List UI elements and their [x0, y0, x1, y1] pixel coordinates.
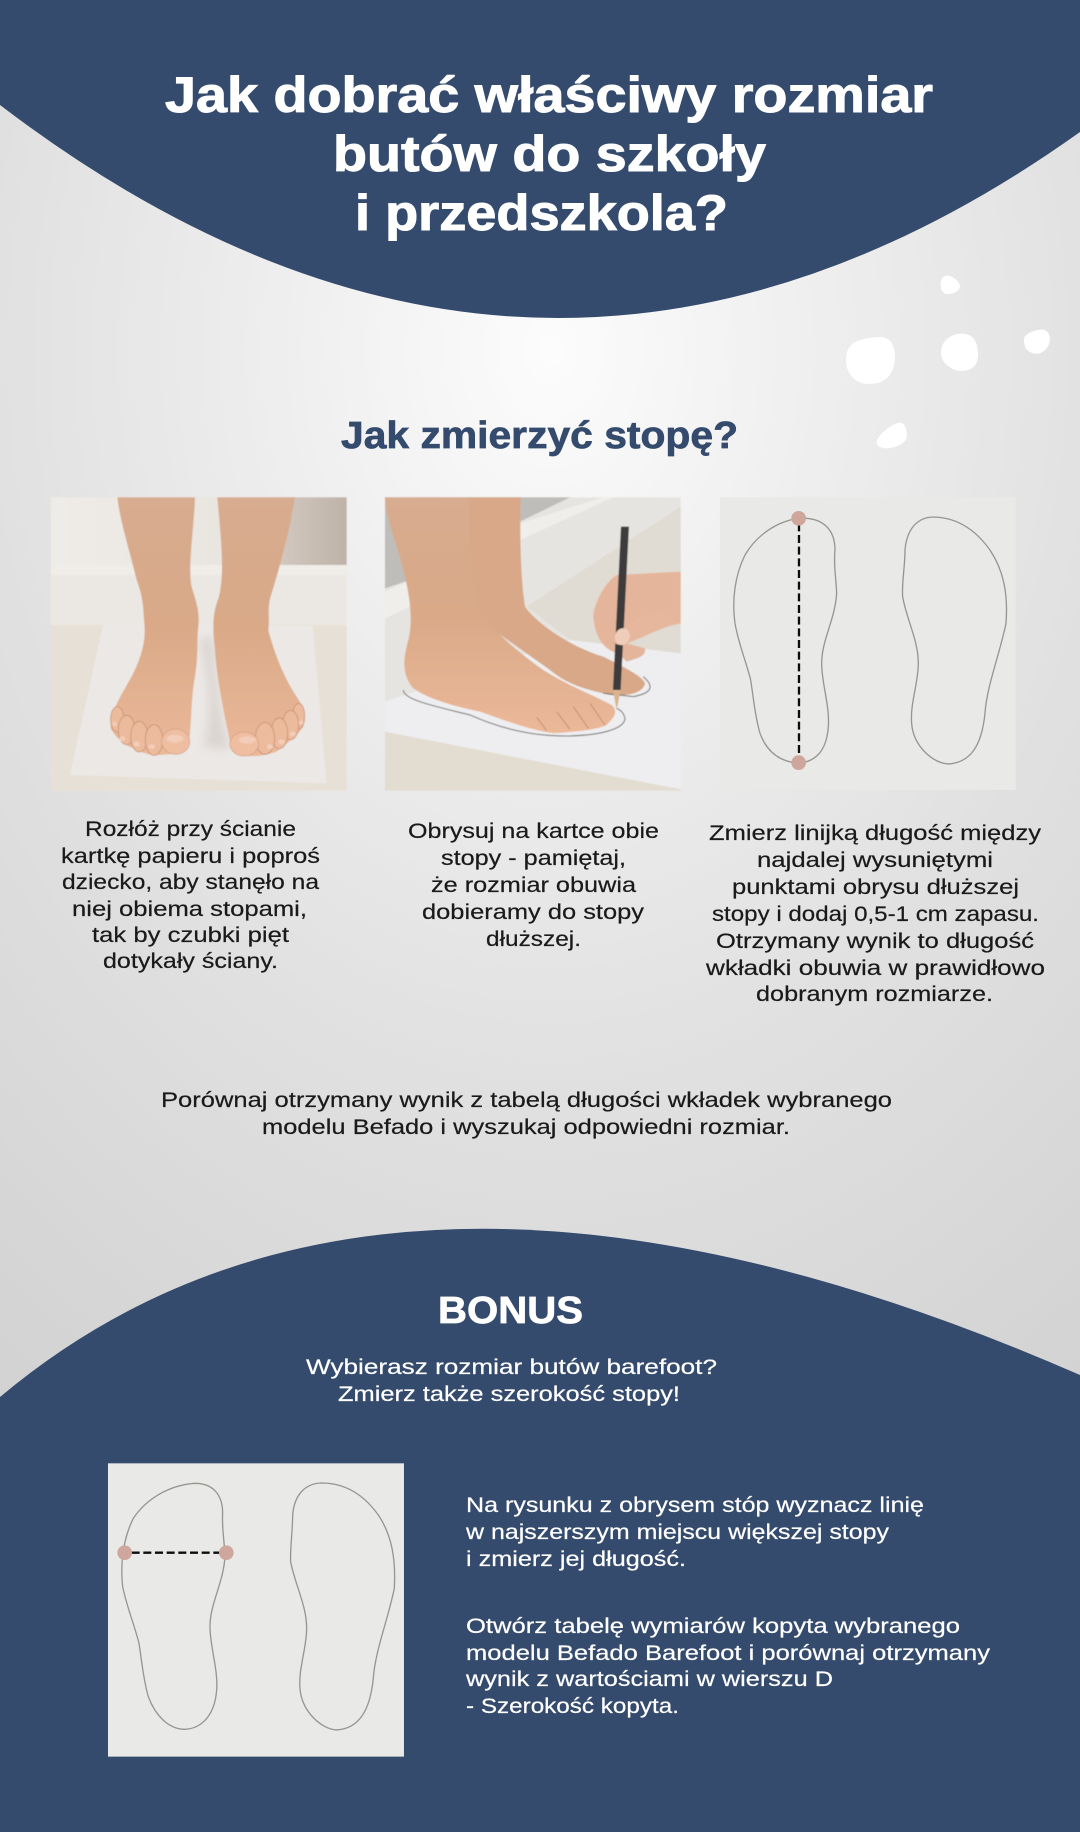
dashed length line	[795, 523, 802, 758]
bonus band	[0, 1229, 1080, 1832]
left foot outline	[122, 1483, 225, 1729]
bonus instructions: open the table: wynik z wartościami w wierszu D	[465, 1668, 833, 1691]
left foot outline	[734, 518, 837, 763]
comparison note: Porównaj otrzymany wynik z tabelą długości wkładek wybranego	[161, 1089, 892, 1112]
right foot outline	[902, 517, 1007, 764]
step 1 text: niej obiema stopami,	[72, 898, 307, 921]
bonus subheading	[306, 1356, 717, 1406]
step 2 text	[408, 820, 659, 951]
title	[165, 67, 933, 241]
step 3 text	[705, 822, 1045, 1006]
step 2 text: że rozmiar obuwia	[431, 874, 636, 897]
bonus instructions: open the table	[465, 1615, 991, 1718]
step 3 text: Zmierz linijką długość między	[709, 822, 1042, 845]
bonus instructions: draw a line: Na rysunku z obrysem stóp wyznacz linię	[466, 1494, 924, 1517]
step 2 text: Obrysuj na kartce obie	[408, 820, 659, 843]
decorative white blobs	[846, 276, 1050, 448]
step 1 text: tak by czubki pięt	[92, 924, 289, 947]
step 3 text: najdalej wysuniętymi	[757, 849, 993, 872]
step 3 text: dobranym rozmiarze.	[756, 983, 993, 1006]
step 1 text: kartkę papieru i poproś	[61, 845, 320, 868]
title: butów do szkoły	[333, 126, 766, 182]
bonus instructions: open the table: Otwórz tabelę wymiarów kopyta wybranego	[466, 1615, 960, 1638]
title: i przedszkola?	[355, 185, 728, 241]
left marker	[117, 1545, 132, 1560]
photo: tracing the foot outline with a pencil	[385, 497, 681, 791]
step 1 text: dziecko, aby stanęło na	[62, 871, 319, 894]
bonus instructions: draw a line	[465, 1494, 924, 1571]
step 1 text: dotykały ściany.	[103, 950, 278, 973]
bonus heading: BONUS	[438, 1290, 583, 1332]
step 2 text: stopy - pamiętaj,	[441, 847, 626, 870]
step 3 text: stopy i dodaj 0,5-1 cm zapasu.	[712, 903, 1039, 926]
title: Jak dobrać właściwy rozmiar	[165, 67, 933, 123]
step 2 text: dobieramy do stopy	[422, 901, 645, 924]
photo: foot outlines with width measurement	[108, 1463, 404, 1757]
heading: how to measure: Jak zmierzyć stopę?	[341, 415, 738, 457]
bonus instructions: draw a line: w najszerszym miejscu większej stopy	[465, 1521, 890, 1544]
step 3 text: wkładki obuwia w prawidłowo	[705, 957, 1045, 980]
photo: feet standing on paper	[51, 497, 347, 791]
bonus instructions: open the table: modelu Befado Barefoot i porównaj otrzymany	[466, 1642, 991, 1665]
step 3 text: punktami obrysu dłuższej	[732, 876, 1019, 899]
header band	[0, 0, 1080, 318]
right foot outline	[291, 1483, 395, 1730]
comparison note: modelu Befado i wyszukaj odpowiedni rozmiar.	[262, 1116, 790, 1139]
right marker	[219, 1545, 234, 1560]
bonus subheading: Wybierasz rozmiar butów barefoot?	[306, 1356, 717, 1379]
bottom marker	[791, 755, 806, 770]
top marker	[791, 511, 806, 526]
dashed width line	[132, 1549, 220, 1556]
comparison note	[161, 1089, 892, 1139]
step 1 text	[61, 818, 320, 973]
bonus instructions: open the table: - Szerokość kopyta.	[466, 1695, 679, 1718]
step 1 text: Rozłóż przy ścianie	[85, 818, 296, 841]
step 3 text: Otrzymany wynik to długość	[716, 930, 1034, 953]
step 2 text: dłuższej.	[486, 928, 581, 951]
photo: foot outlines with length measurement	[720, 497, 1016, 790]
bonus subheading: Zmierz także szerokość stopy!	[338, 1383, 680, 1406]
bonus instructions: draw a line: i zmierz jej długość.	[466, 1548, 686, 1571]
